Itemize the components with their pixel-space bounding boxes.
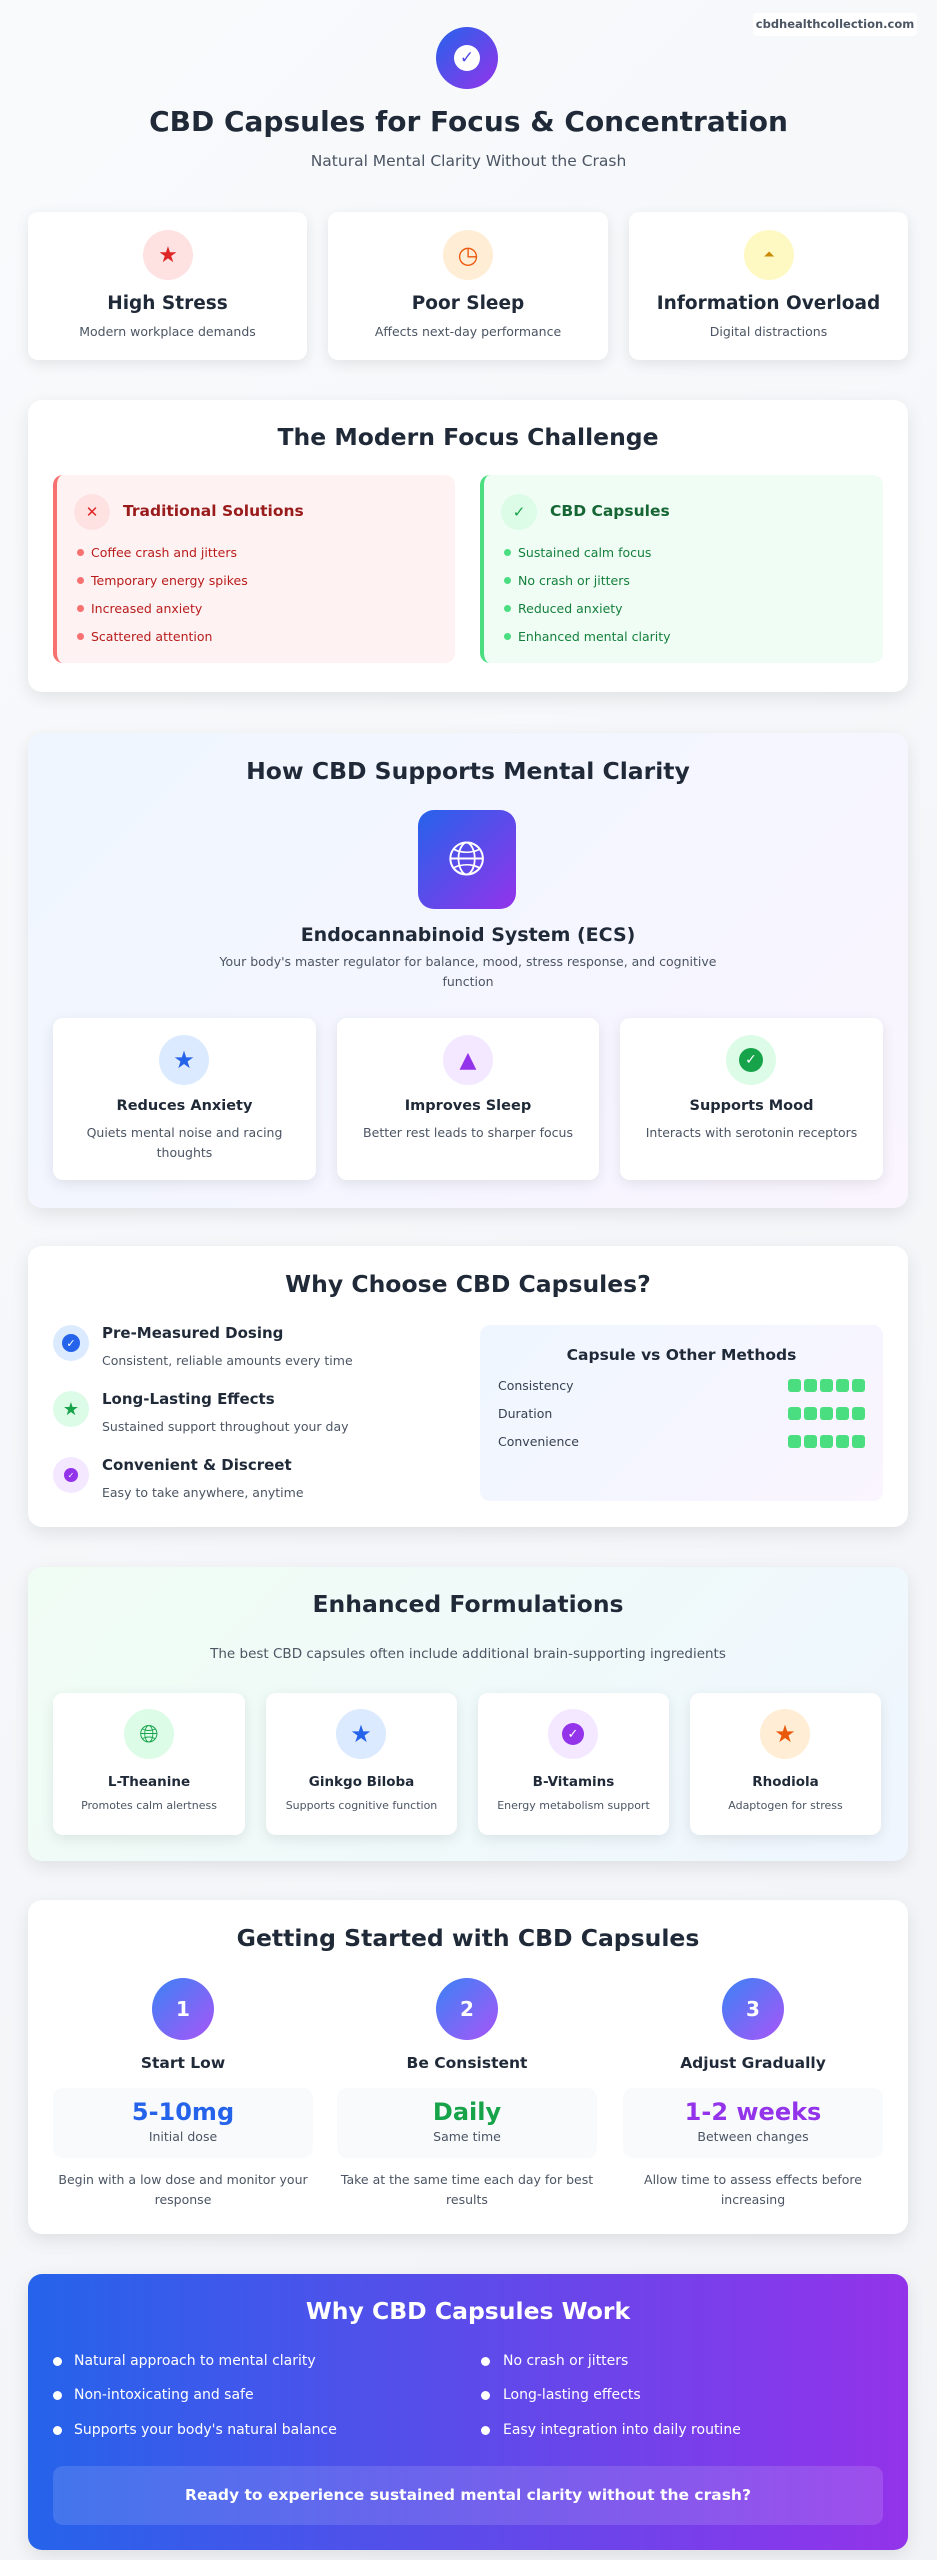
card: high stress: [28, 212, 307, 360]
step 1: 1: [176, 1997, 190, 2021]
card: B-Vitamins: ✓: [568, 1726, 578, 1742]
feature: convenient & discreet: ✓: [68, 1470, 74, 1480]
step 2: Be Consistent: [407, 2054, 527, 2072]
benefits list: Supports your body's natural balance: [74, 2422, 337, 2438]
step 1: Begin with a low dose and monitor your response: [58, 2172, 308, 2207]
panel: how CBD supports mental clarity: [28, 733, 908, 1208]
heading: How CBD Supports Mental Clarity: [246, 757, 690, 785]
card: reduces anxiety: Reduces Anxiety: [117, 1098, 252, 1114]
watermark: [753, 13, 917, 36]
step 3: 1-2 weeks: [685, 2098, 821, 2126]
step 2: 2: [460, 1997, 474, 2021]
feature: convenient & discreet: Convenient & Discreet: [102, 1456, 292, 1474]
icon: header check: [436, 27, 498, 89]
heading: Why CBD Capsules Work: [306, 2297, 630, 2325]
feature: long-lasting effects: Sustained support throughout your day: [102, 1419, 349, 1434]
ECS title: Endocannabinoid System (ECS): [301, 924, 635, 946]
heading: Getting Started with CBD Capsules: [237, 1924, 699, 1952]
card: poor sleep: ◷: [458, 241, 478, 269]
feature: long-lasting effects: Long-Lasting Effects: [102, 1390, 275, 1408]
card: L-Theanine: L-Theanine: [108, 1774, 190, 1790]
card: supports mood: ✓: [745, 1052, 757, 1068]
step 2: [340, 1978, 593, 2207]
card: information overload: Information Overload: [657, 293, 880, 314]
icon: globe: 🌐︎: [448, 831, 486, 887]
card: reduces anxiety: Quiets mental noise and racing thoughts: [87, 1125, 282, 1160]
call to action: Ready to experience sustained mental clarity without the crash?: [185, 2486, 751, 2504]
panel: why choose CBD capsules: [28, 1246, 908, 1527]
box: traditional solutions: Temporary energy spikes: [91, 573, 248, 588]
feature: long-lasting effects: [53, 1390, 349, 1434]
step 2: Take at the same time each day for best results: [341, 2172, 593, 2207]
comparison panel: [480, 1325, 883, 1501]
panel: challenge cards: [26, 212, 910, 366]
box: traditional solutions: [53, 475, 455, 663]
comparison panel: Convenience: [498, 1434, 579, 1449]
subtitle: The best CBD capsules often include additional brain-supporting ingredients: [210, 1646, 726, 1662]
card: information overload: Digital distractions: [710, 324, 827, 339]
card: high stress: ★: [158, 242, 178, 268]
call to action: [53, 2466, 883, 2525]
card: Rhodiola: Rhodiola: [752, 1774, 819, 1790]
card: reduces anxiety: [53, 1018, 316, 1180]
step 3: Allow time to assess effects before increasing: [644, 2172, 862, 2207]
panel: modern focus challenge: [28, 400, 908, 692]
box: cbd capsules: No crash or jitters: [518, 573, 630, 588]
card: improves sleep: ▲: [460, 1048, 476, 1072]
card: L-Theanine: Promotes calm alertness: [81, 1799, 217, 1812]
card: poor sleep: Affects next-day performance: [375, 324, 561, 339]
card: L-Theanine: [53, 1693, 245, 1835]
feature: convenient & discreet: Easy to take anywhere, anytime: [102, 1485, 304, 1500]
card: information overload: ⏶: [763, 247, 775, 263]
card: Ginkgo Biloba: ★: [350, 1720, 372, 1748]
panel: why CBD capsules work: [28, 2274, 908, 2550]
card: improves sleep: Better rest leads to sharper focus: [363, 1125, 573, 1140]
step 1: 5-10mg: [132, 2098, 234, 2126]
step 1: [58, 1978, 308, 2207]
box: cbd capsules: Enhanced mental clarity: [518, 629, 671, 644]
feature: convenient & discreet: [53, 1456, 304, 1500]
card: Rhodiola: ★: [774, 1720, 796, 1748]
card: improves sleep: [337, 1018, 599, 1180]
card: B-Vitamins: Energy metabolism support: [497, 1799, 650, 1812]
icon: globe: [418, 810, 516, 909]
feature: long-lasting effects: ★: [63, 1398, 79, 1420]
card: Ginkgo Biloba: Ginkgo Biloba: [309, 1774, 414, 1790]
feature: pre-measured dosing: Pre-Measured Dosing: [102, 1324, 283, 1342]
card: Ginkgo Biloba: [266, 1693, 457, 1835]
box: traditional solutions: Coffee crash and jitters: [91, 545, 237, 560]
box: cbd capsules: ✓: [513, 503, 525, 521]
box: cbd capsules: CBD Capsules: [550, 502, 670, 520]
card: L-Theanine: 🌐︎: [139, 1720, 159, 1748]
box: cbd capsules: [480, 475, 883, 663]
card: B-Vitamins: B-Vitamins: [533, 1774, 614, 1790]
box: traditional solutions: Increased anxiety: [91, 601, 202, 616]
card: Rhodiola: [690, 1693, 881, 1835]
benefits list: Non-intoxicating and safe: [74, 2387, 254, 2403]
card: poor sleep: Poor Sleep: [412, 293, 524, 314]
box: cbd capsules: Sustained calm focus: [518, 545, 651, 560]
card: high stress: High Stress: [107, 293, 228, 314]
card: reduces anxiety: ★: [173, 1046, 195, 1074]
card: supports mood: Supports Mood: [690, 1098, 813, 1114]
benefits list: Easy integration into daily routine: [503, 2422, 741, 2438]
heading: Why Choose CBD Capsules?: [285, 1270, 651, 1298]
card: high stress: Modern workplace demands: [79, 324, 256, 339]
box: traditional solutions: Traditional Solutions: [123, 502, 304, 520]
card: Rhodiola: Adaptogen for stress: [728, 1799, 843, 1812]
card: Ginkgo Biloba: Supports cognitive function: [286, 1799, 437, 1812]
comparison panel: Consistency: [498, 1378, 574, 1393]
card: supports mood: [620, 1018, 883, 1180]
panel: enhanced formulations: [28, 1567, 908, 1861]
card: supports mood: Interacts with serotonin receptors: [646, 1125, 857, 1140]
step 3: Adjust Gradually: [680, 2054, 826, 2072]
heading: The Modern Focus Challenge: [277, 423, 659, 451]
card: information overload: [629, 212, 908, 360]
title: CBD Capsules for Focus & Concentration: [149, 105, 788, 138]
box: traditional solutions: ✕: [86, 503, 98, 521]
comparison panel: Duration: [498, 1406, 552, 1421]
icon: header check: ✓: [460, 48, 474, 68]
step 3: 3: [746, 1997, 760, 2021]
step 3: Between changes: [697, 2129, 809, 2144]
ECS description: Your body's master regulator for balance, mood, stress response, and cognitive function: [220, 954, 716, 989]
feature: pre-measured dosing: Consistent, reliable amounts every time: [102, 1353, 353, 1368]
card: improves sleep: Improves Sleep: [405, 1098, 531, 1114]
benefits list: Natural approach to mental clarity: [74, 2353, 316, 2369]
step 3: [644, 1978, 862, 2207]
step 2: Same time: [433, 2129, 501, 2144]
heading: Enhanced Formulations: [312, 1590, 624, 1618]
step 1: Start Low: [141, 2054, 225, 2072]
feature: pre-measured dosing: ✓: [66, 1336, 76, 1350]
subtitle: Natural Mental Clarity Without the Crash: [311, 152, 626, 170]
feature: pre-measured dosing: [53, 1324, 353, 1368]
step 1: Initial dose: [149, 2129, 217, 2144]
benefits list: Long-lasting effects: [503, 2387, 641, 2403]
card: poor sleep: [328, 212, 608, 360]
comparison panel: Capsule vs Other Methods: [567, 1346, 796, 1364]
step 2: Daily: [433, 2098, 501, 2126]
card: B-Vitamins: [478, 1693, 669, 1835]
box: cbd capsules: Reduced anxiety: [518, 601, 623, 616]
benefits list: No crash or jitters: [503, 2353, 628, 2369]
box: traditional solutions: Scattered attention: [91, 629, 212, 644]
watermark: cbdhealthcollection.com: [756, 17, 914, 31]
panel: getting started: [28, 1900, 908, 2234]
benefits list: [53, 2353, 741, 2438]
